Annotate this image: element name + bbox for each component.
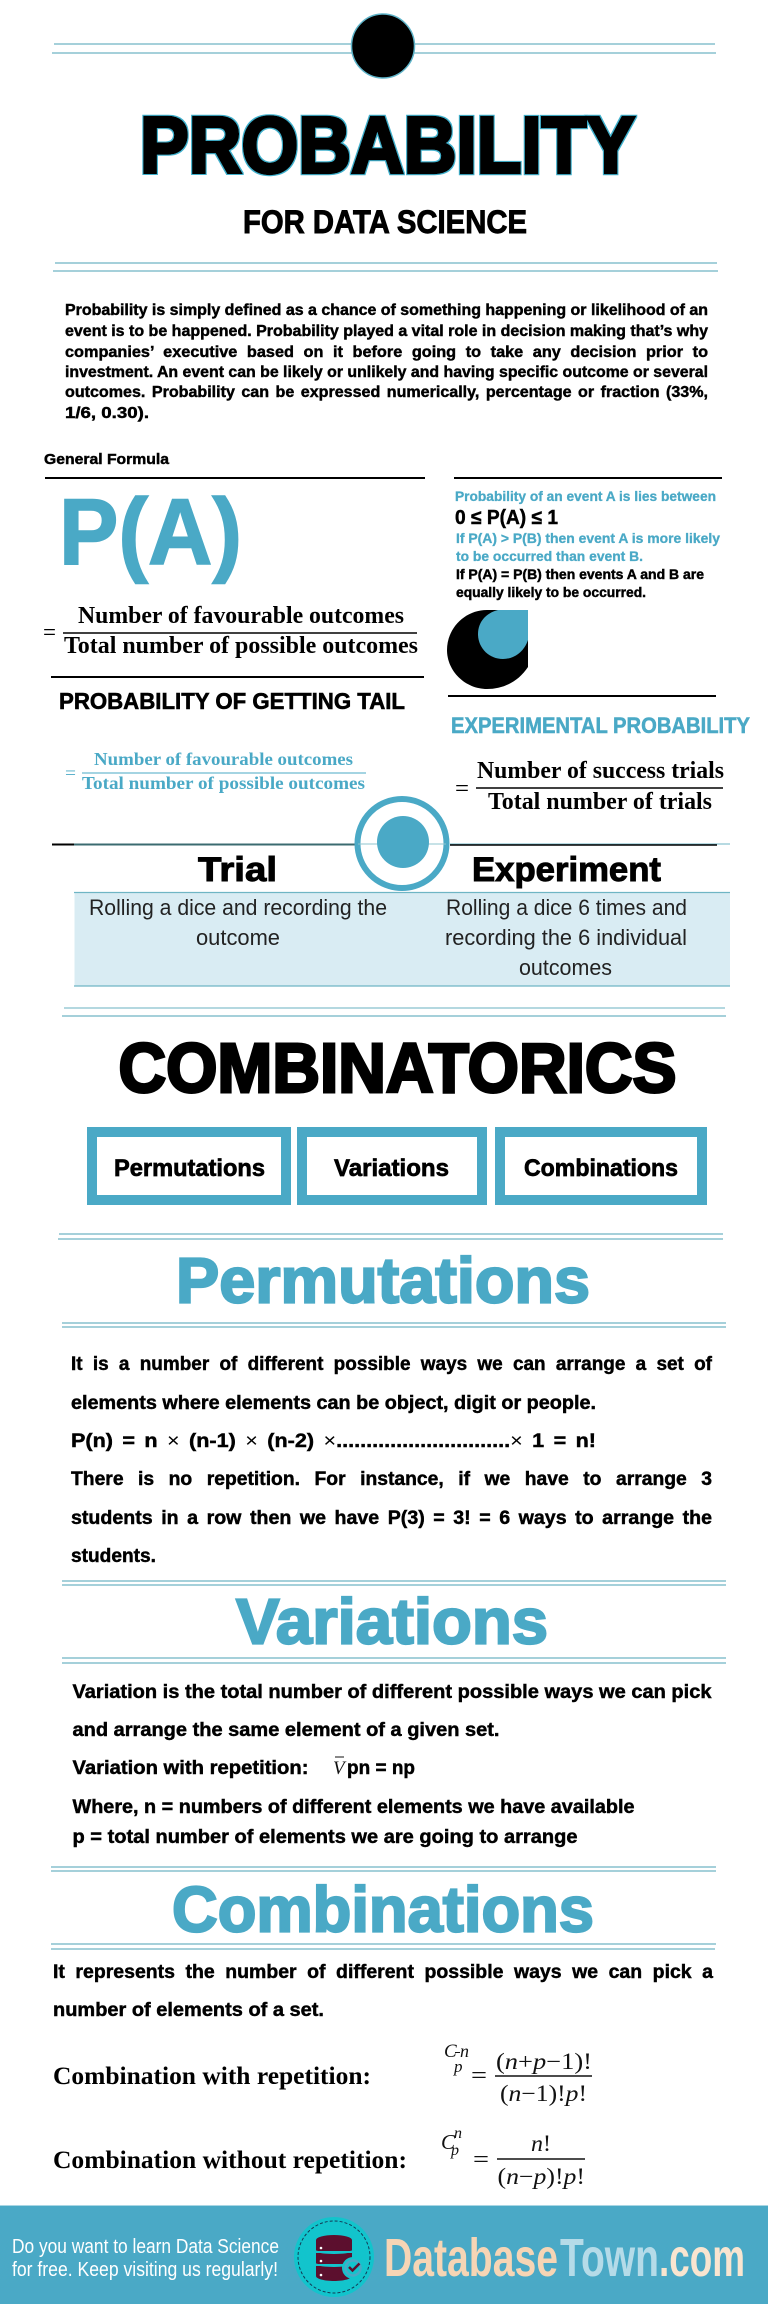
button: variations bbox=[302, 1132, 482, 1200]
text block: variations explanation: Where, n = numbers of different elements we have available bbox=[72, 1797, 634, 1818]
trial description bbox=[89, 895, 387, 950]
panel: probability range notes: If P(A) = P(B) then events A and B are bbox=[456, 566, 704, 582]
heading: permutations: Permutations bbox=[176, 1244, 590, 1316]
footer band bbox=[0, 2205, 768, 2304]
teal formula: Number of favourable outcomes bbox=[94, 749, 353, 769]
text block: variations explanation: pn = np bbox=[347, 1758, 415, 1779]
text block: variations explanation: p = total number of elements we are going to arrange bbox=[72, 1827, 578, 1848]
panel: probability range notes: to be occurred than event B. bbox=[456, 548, 643, 564]
text block: permutations explanation: students in a row then we have P(3) = 3! = 6 ways to arrange the bbox=[71, 1508, 712, 1529]
text block: permutations explanation: students. bbox=[71, 1546, 156, 1567]
button: combinations bbox=[500, 1132, 702, 1200]
teal formula bbox=[65, 749, 366, 793]
icon: crescent circle bbox=[447, 610, 528, 689]
formula: success trials over total trials: = bbox=[455, 776, 469, 802]
formula: favourable over total: = bbox=[43, 620, 56, 646]
formula: combination without repetition: = bbox=[473, 2147, 489, 2173]
formula: favourable over total: Number of favourable outcomes bbox=[78, 603, 404, 629]
text block: combinations explanation: number of elements of a set. bbox=[53, 2000, 324, 2021]
panel: trial vs experiment bbox=[52, 799, 730, 986]
big P(A) symbol: P(A) bbox=[59, 479, 242, 584]
table band bbox=[74, 892, 730, 986]
formula: success trials over total trials bbox=[455, 758, 724, 815]
buttons: three combinatorics types bbox=[92, 1132, 702, 1200]
experiment description bbox=[445, 895, 687, 980]
heading: general formula: General Formula bbox=[44, 451, 170, 468]
panel: probability range notes: If P(A) > P(B) then event A is more likely bbox=[456, 530, 720, 546]
formula: combination with repetition: C bbox=[444, 2041, 457, 2062]
formula: combination with repetition: (n−1)!p! bbox=[500, 2081, 587, 2106]
formula: combination without repetition: C bbox=[441, 2130, 456, 2154]
heading: combinatorics: COMBINATORICS bbox=[118, 1029, 676, 1107]
text block: permutations explanation: It is a number of different possible ways we can arrange a set of bbox=[71, 1354, 713, 1375]
formula: combination with repetition: = bbox=[471, 2063, 487, 2089]
intro paragraph: investment. An event can be likely or unlikely and having specific outcome or several bbox=[65, 364, 708, 381]
panel: probability range notes: Probability of an event A is lies between bbox=[455, 488, 716, 504]
text block: variations explanation bbox=[72, 1682, 712, 1848]
title: PROBABILITY bbox=[140, 100, 635, 190]
footer call to action: for free. Keep visiting us regularly! bbox=[12, 2259, 278, 2281]
formula: favourable over total: Total number of possible outcomes bbox=[64, 633, 418, 659]
heading: combinations: Combinations bbox=[172, 1874, 594, 1946]
formula: combination with repetition: Combination with repetition: bbox=[53, 2063, 371, 2090]
trial description: Rolling a dice and recording the bbox=[89, 895, 387, 920]
teal formula: = bbox=[65, 763, 76, 783]
intro paragraph: event is to be happened. Probability played a vital role in decision making that’s why bbox=[65, 323, 708, 340]
text block: variations explanation: Variation with repetition: bbox=[72, 1758, 308, 1779]
formula: combination without repetition: n bbox=[454, 2125, 462, 2142]
icon: target ring bbox=[358, 799, 446, 888]
trial description: outcome bbox=[196, 925, 280, 950]
formula: combination without repetition: p bbox=[450, 2142, 459, 2159]
heading: probability of getting tail: PROBABILITY OF GETTING TAIL bbox=[59, 688, 405, 714]
text block: variations explanation: V bbox=[333, 1758, 347, 1779]
intro paragraph: outcomes. Probability can be expressed numerically, percentage or fraction (33%, bbox=[65, 384, 708, 401]
text block: combinations explanation bbox=[53, 1962, 713, 2021]
intro paragraph bbox=[65, 302, 708, 422]
text block: permutations explanation: P(n) = n × (n-1) × (n-2) ×............................. × 1 = n! bbox=[71, 1431, 596, 1452]
experiment description: Rolling a dice 6 times and bbox=[446, 895, 687, 920]
experiment description: recording the 6 individual bbox=[445, 925, 687, 950]
brand name: Town bbox=[560, 2228, 659, 2288]
text block: variations explanation: Variation is the total number of different possible ways we can pick bbox=[72, 1682, 712, 1703]
heading: variations: Variations bbox=[236, 1586, 548, 1658]
brand name: Database bbox=[384, 2228, 558, 2288]
text block: permutations explanation: elements where elements can be object, digit or people. bbox=[71, 1393, 596, 1414]
teal formula: Total number of possible outcomes bbox=[82, 773, 365, 793]
panel: probability range notes bbox=[455, 488, 720, 600]
panel: probability range notes: 0 ≤ P(A) ≤ 1 bbox=[455, 507, 558, 529]
formula: combination without repetition: (n−p)!p! bbox=[498, 2164, 585, 2189]
formula: combination with repetition bbox=[53, 2041, 592, 2106]
footer call to action bbox=[12, 2236, 279, 2281]
text block: permutations explanation: There is no repetition. For instance, if we have to arrange 3 bbox=[71, 1469, 712, 1490]
icon: database logo bbox=[294, 2217, 374, 2297]
intro paragraph: 1/6, 0.30). bbox=[65, 405, 149, 422]
button: permutations bbox=[92, 1132, 286, 1200]
text block: combinations explanation: It represents the number of different possible ways we can pick a bbox=[53, 1962, 713, 1983]
experiment description: outcomes bbox=[519, 955, 612, 980]
panel: probability range notes: equally likely to be occurred. bbox=[456, 584, 646, 600]
formula: combination without repetition bbox=[53, 2125, 585, 2189]
formula: favourable over total bbox=[43, 603, 418, 659]
formula: success trials over total trials: Number of success trials bbox=[477, 758, 724, 784]
header ornament: double lines and black circle bbox=[52, 14, 716, 78]
button: combinations: Combinations bbox=[524, 1155, 678, 1182]
text block: permutations explanation bbox=[71, 1354, 713, 1567]
intro paragraph: Probability is simply defined as a chance of something happening or likelihood of an bbox=[65, 302, 708, 319]
formula: combination with repetition: (n+p−1)! bbox=[496, 2049, 592, 2074]
formula: combination without repetition: Combination without repetition: bbox=[53, 2147, 407, 2174]
button: permutations: Permutations bbox=[114, 1155, 265, 1182]
footer call to action: Do you want to learn Data Science bbox=[12, 2236, 279, 2258]
button: variations: Variations bbox=[334, 1155, 449, 1182]
heading: experimental probability: EXPERIMENTAL PROBABILITY bbox=[451, 713, 750, 738]
formula: combination with repetition: n bbox=[460, 2041, 469, 2061]
formula: combination without repetition: n! bbox=[531, 2131, 551, 2156]
formula: success trials over total trials: Total number of trials bbox=[488, 789, 712, 815]
intro paragraph: companies’ executive based on it before going to take any decision prior to bbox=[65, 344, 708, 361]
heading: trial: Trial bbox=[198, 851, 277, 889]
text block: variations explanation: and arrange the same element of a given set. bbox=[72, 1720, 499, 1741]
heading: experiment: Experiment bbox=[472, 851, 661, 889]
formula: combination with repetition: p bbox=[453, 2057, 462, 2076]
subtitle: FOR DATA SCIENCE bbox=[243, 204, 527, 240]
brand name bbox=[384, 2228, 745, 2288]
